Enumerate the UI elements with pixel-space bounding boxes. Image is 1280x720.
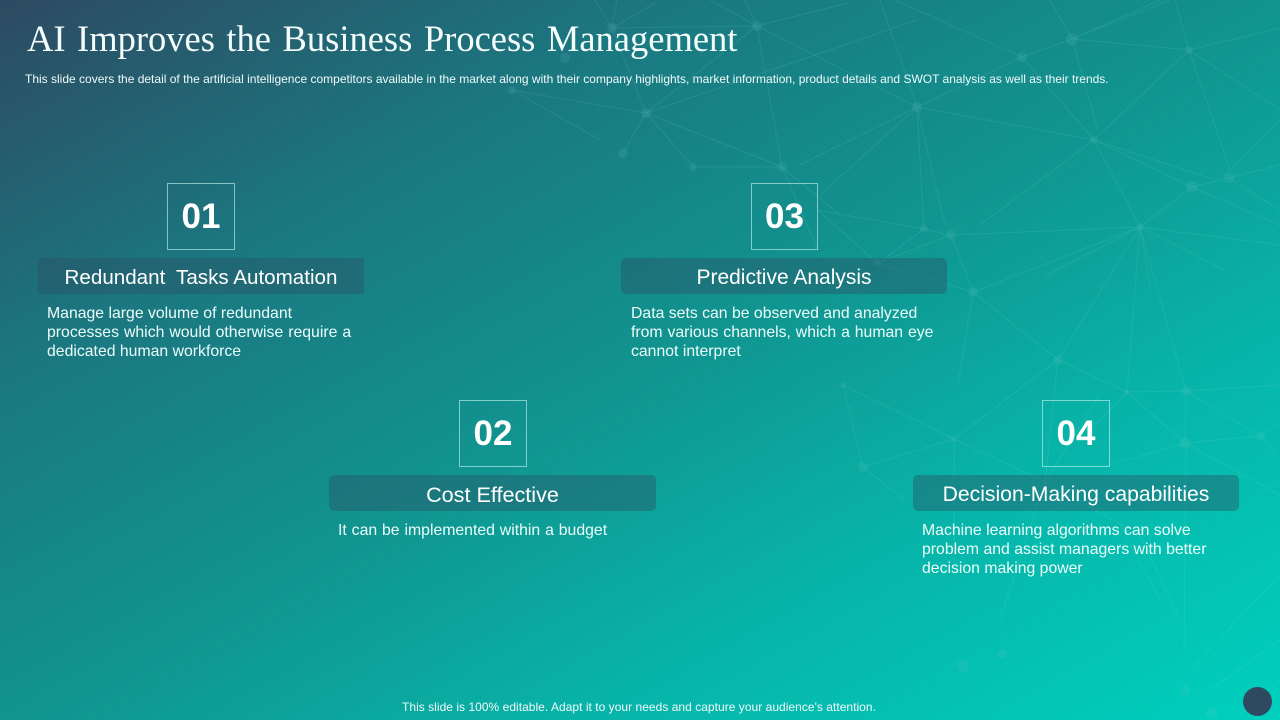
- description 01: dedicated human workforce: [47, 343, 241, 360]
- subtitle: This slide covers the detail of the artificial intelligence competitors available in the market along with their company highlights, market information, product details and SWOT analysis as well as their trends.: [25, 72, 1109, 86]
- description 03: from various channels, which a human eye: [631, 324, 933, 341]
- heading: Redundant Tasks Automation: [38, 258, 364, 294]
- footer note: This slide is 100% editable. Adapt it to your needs and capture your audience's attention.: [402, 700, 876, 714]
- panel: 04 Decision-Making capabilities: [913, 400, 1239, 577]
- description 01: [47, 305, 352, 360]
- panel: 02 Cost Effective: [329, 400, 656, 539]
- number 04: [1042, 400, 1110, 467]
- description 01: processes which would otherwise require a: [47, 324, 351, 341]
- icon: dark circle: [1243, 687, 1272, 716]
- heading: Predictive Analysis: [621, 258, 947, 294]
- heading: Decision-Making capabilities: [913, 475, 1239, 511]
- number 02: 02: [474, 414, 512, 453]
- number 03: 03: [765, 197, 804, 236]
- description 04: [922, 522, 1206, 577]
- number 01: 01: [182, 197, 220, 236]
- heading: Redundant Tasks Automation: Redundant Tasks Automation: [65, 266, 337, 289]
- description 04: problem and assist managers with better: [922, 541, 1206, 558]
- heading: Cost Effective: [329, 475, 656, 511]
- heading: Predictive Analysis: Predictive Analysis: [696, 266, 872, 289]
- title: AI Improves the Business Process Management: [27, 18, 737, 59]
- description 04: Machine learning algorithms can solve: [922, 522, 1191, 539]
- description 03: cannot interpret: [631, 343, 741, 360]
- description 02: It can be implemented within a budget: [338, 522, 607, 539]
- number 04: 04: [1057, 414, 1095, 453]
- heading: Cost Effective: Cost Effective: [426, 482, 559, 507]
- heading: Decision-Making capabilities: Decision-Making capabilities: [943, 483, 1209, 506]
- number 03: [751, 183, 818, 250]
- description 03: Data sets can be observed and analyzed: [631, 305, 917, 322]
- panel: 01 Redundant Tasks Automation: [38, 183, 364, 360]
- description 01: Manage large volume of redundant: [47, 305, 292, 322]
- number 02: [459, 400, 527, 467]
- description 03: [631, 305, 933, 360]
- description 04: decision making power: [922, 560, 1083, 577]
- number 01: [167, 183, 235, 250]
- panel: 03 Predictive Analysis: [621, 183, 947, 360]
